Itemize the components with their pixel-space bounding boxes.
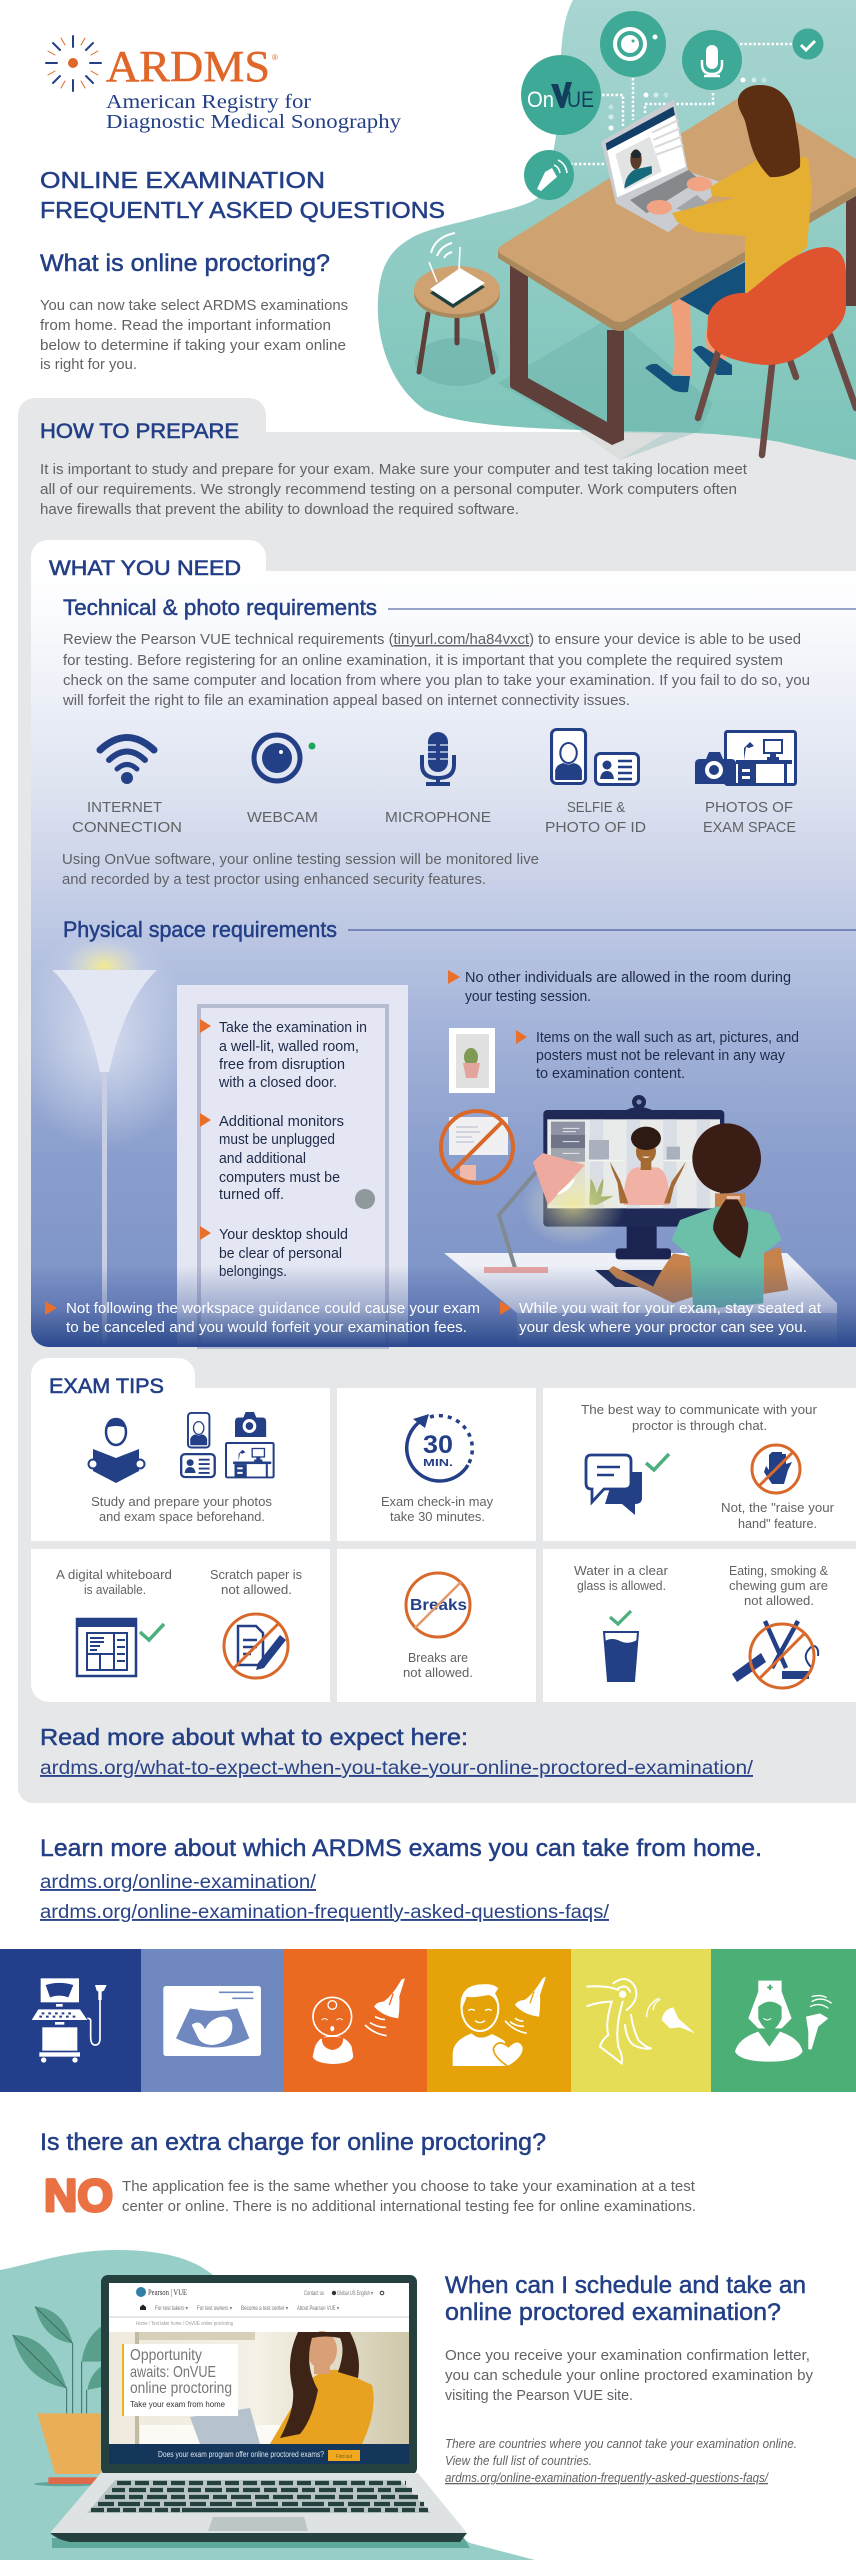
OnVue monitoring note: and recorded by a test proctor using enhanced security features. — [62, 871, 486, 888]
NO graphic: NO — [44, 2170, 113, 2221]
bullet: additional monitors: must be unplugged — [219, 1132, 335, 1148]
technical requirements text: will forfeit the right to file an examination appeal based on internet connectivity issues. — [62, 692, 630, 709]
heading: when can I schedule: When can I schedule and take an — [445, 2272, 806, 2299]
teal background blob — [378, 0, 856, 460]
icon: webcam — [254, 735, 316, 781]
logo wordmark: ARDMS — [106, 42, 270, 91]
label: photos of exam space: PHOTOS OF — [705, 799, 793, 816]
label: microphone: MICROPHONE — [385, 809, 491, 826]
bullet: items on the wall: posters must not be relevant in any way — [536, 1048, 786, 1064]
red chair — [707, 247, 846, 365]
cell: breaks not allowed: Breaks are — [408, 1650, 468, 1665]
hero card: awaits: OnVUE — [130, 2364, 216, 2381]
icon: no breaks — [406, 1573, 470, 1637]
bullet: no other individuals: No other individuals are allowed in the room during — [465, 970, 791, 986]
bullet: clear desktop: be clear of personal — [219, 1246, 342, 1262]
bullet: items on the wall: to examination content. — [536, 1066, 685, 1082]
bullet: well-lit room: Take the examination in — [219, 1020, 367, 1036]
floor lamp — [14, 930, 194, 1347]
bullet: additional monitors: Additional monitors — [219, 1114, 344, 1130]
icon: green check — [610, 1611, 631, 1624]
cell: communicate through chat: proctor is through chat. — [632, 1418, 767, 1433]
label: webcam: WEBCAM — [247, 809, 318, 826]
picture frame with cactus — [449, 1028, 495, 1093]
heading: when can I schedule: online proctored examination? — [445, 2299, 781, 2326]
woman seen from behind — [608, 1123, 788, 1310]
tip: study and prepare — [91, 1494, 273, 1524]
read more block: ardms.org/what-to-expect-when-you-take-your-online-proctored-examination/ — [40, 1758, 754, 1779]
read more block — [40, 1724, 754, 1779]
colored specialty icon band — [0, 1949, 856, 2092]
router side table — [414, 233, 500, 386]
heading: how to prepare: HOW TO PREPARE — [40, 420, 239, 443]
bullet: no other individuals: your testing session. — [465, 989, 591, 1005]
probe badge — [524, 150, 574, 200]
cell: breaks not allowed: not allowed. — [403, 1665, 473, 1680]
Pearson header: Become a test center ▾ — [241, 2306, 288, 2312]
bullet: workspace guidance: Not following the workspace guidance could cause your exam — [66, 1300, 480, 1317]
intro paragraph: below to determine if taking your exam online — [40, 337, 346, 354]
panel background gradient — [31, 540, 856, 1347]
icon: green check — [646, 1454, 669, 1470]
tile: fetal ultrasound — [141, 1949, 284, 2092]
label: selfie and photo of id — [545, 799, 646, 836]
cell: whiteboard and scratch paper: not allowed. — [221, 1582, 292, 1597]
technical requirements text: for testing. Before registering for an online examination, it is important that you complete the required system — [63, 652, 783, 669]
exam tips tab and first cell — [31, 1358, 330, 1541]
scheduling paragraph: visiting the Pearson VUE site. — [445, 2387, 633, 2404]
label: internet connection: INTERNET — [87, 799, 162, 816]
OnVUE badge: On — [527, 87, 554, 112]
desk — [444, 1253, 837, 1347]
bullet: items on the wall: Items on the wall such as art, pictures, and — [536, 1030, 799, 1046]
countries note: There are countries where you cannot take your examination online. — [445, 2436, 797, 2451]
tile: ultrasound machine — [0, 1949, 141, 2092]
intro paragraph: You can now take select ARDMS examinations — [40, 297, 348, 314]
grey panel background — [18, 398, 856, 1803]
shorts — [678, 262, 745, 315]
icon: 30 minute timer: MIN. — [423, 1457, 453, 1469]
label: photos of exam space — [703, 799, 796, 836]
hero card: Take your exam from home — [130, 2400, 226, 2409]
cell: communicate through chat: Not, the "raise your — [721, 1500, 835, 1515]
Pearson header: Contact us — [304, 2291, 324, 2297]
cell: breaks not allowed — [337, 1549, 536, 1702]
check badge — [792, 28, 824, 60]
cell: water and food: Water in a clear — [574, 1563, 669, 1578]
yellow shirt — [672, 157, 812, 293]
illustration: laptop with Pearson VUE page — [0, 2250, 535, 2560]
cell: water and food: Eating, smoking & — [729, 1563, 828, 1578]
how to prepare text: have firewalls that prevent the ability to download the required software. — [40, 501, 519, 518]
logo: ARDMS: Diagnostic Medical Sonography — [106, 111, 401, 133]
illustration: woman at desk taking online exam — [378, 0, 856, 460]
bullet: additional monitors: computers must be — [219, 1170, 340, 1186]
technical requirements text: Review the Pearson VUE technical requirements (tinyurl.com/ha84vxct) to ensure your device is able to be used — [63, 631, 801, 648]
call-to-action bar: Does your exam program offer online proctored exams? — [158, 2450, 324, 2459]
hero card: Opportunity — [130, 2347, 202, 2364]
how to prepare text: all of our requirements. We strongly recommend testing on a personal computer. Work computers often — [40, 481, 737, 498]
scheduling paragraph — [445, 2347, 813, 2404]
panel: what you need — [14, 540, 856, 1347]
Pearson header: For test takers ▾ — [155, 2306, 188, 2312]
bullet: additional monitors — [200, 1113, 344, 1203]
bullet: stay seated — [500, 1300, 822, 1336]
cell: whiteboard and scratch paper: A digital whiteboard — [56, 1567, 172, 1582]
Pearson header: About Pearson VUE ▾ — [297, 2306, 339, 2312]
bullet: clear desktop — [200, 1226, 348, 1280]
hero card — [122, 2344, 238, 2416]
desk legs — [510, 262, 624, 445]
pot — [37, 2413, 101, 2474]
title: ONLINE EXAMINATION — [40, 167, 325, 193]
label: selfie and photo of id: SELFIE & — [567, 799, 625, 816]
call-to-action bar — [109, 2444, 409, 2464]
extra charge answer — [122, 2178, 696, 2215]
heading: exam tips: EXAM TIPS — [49, 1375, 164, 1398]
bullet: well-lit room: a well-lit, walled room, — [219, 1039, 359, 1055]
cell: water and food — [543, 1549, 856, 1702]
heading: technical and photo requirements: Technical & photo requirements — [63, 595, 377, 620]
intro paragraph: is right for you. — [40, 356, 137, 373]
laptop — [601, 99, 727, 232]
how to prepare text: It is important to study and prepare for your exam. Make sure your computer and test taking location meet — [40, 461, 748, 478]
bullet: additional monitors: turned off. — [219, 1187, 284, 1203]
icon: 30 minute timer — [407, 1414, 472, 1481]
logo: ARDMS — [46, 36, 401, 133]
scheduling paragraph: you can schedule your online proctored examination by — [445, 2367, 813, 2384]
cell: check-in time: take 30 minutes. — [390, 1509, 485, 1524]
OnVue monitoring note — [62, 851, 539, 888]
tile: sonographer nurse — [711, 1949, 856, 2092]
countries note: View the full list of countries. — [445, 2453, 592, 2468]
icon: no raise hand — [752, 1445, 800, 1493]
bullet: stay seated: While you wait for your exam, stay seated at — [519, 1300, 822, 1317]
microphone badge — [682, 30, 742, 90]
keyboard keys — [91, 2483, 428, 2510]
hair — [738, 85, 800, 177]
label: selfie and photo of id: PHOTO OF ID — [545, 819, 646, 836]
cell: communicate through chat: The best way to communicate with your — [581, 1402, 818, 1417]
floor shadow of desk — [498, 316, 713, 460]
icon: study person reading — [88, 1418, 144, 1483]
cell: whiteboard and scratch paper: Scratch paper is — [210, 1567, 302, 1582]
bullet: workspace guidance: to be canceled and you would forfeit your examination fees. — [66, 1319, 467, 1336]
icon: microphone — [422, 732, 454, 784]
countries note: ardms.org/online-examination-frequently-asked-questions-faqs/ — [445, 2470, 769, 2485]
heading: physical space requirements: Physical space requirements — [63, 917, 337, 942]
keyboard on desk — [595, 1270, 693, 1287]
title — [40, 167, 445, 223]
icon: digital whiteboard — [76, 1618, 137, 1676]
icon: no eating, smoking, gum — [732, 1621, 818, 1688]
extra charge answer: center or online. There is no additional international testing fee for online examinations. — [122, 2198, 696, 2215]
call-to-action bar: Find out — [336, 2454, 352, 2460]
panel: exam tips — [31, 1358, 856, 1702]
bullet: no other individuals — [448, 970, 791, 1005]
hero photo — [109, 2331, 409, 2444]
heading: what you need: WHAT YOU NEED — [49, 557, 241, 580]
webcam on monitor — [626, 1095, 652, 1110]
cell: whiteboard and scratch paper — [31, 1549, 330, 1702]
door knob — [355, 1189, 375, 1209]
tip: study and prepare: and exam space beforehand. — [99, 1509, 265, 1524]
logo starburst — [46, 36, 101, 91]
read more block: Read more about what to expect here: — [40, 1724, 468, 1750]
cell: communicate through chat: hand" feature. — [738, 1516, 817, 1531]
heading: extra charge: Is there an extra charge for online proctoring? — [40, 2129, 546, 2156]
hands — [647, 177, 712, 215]
icon: glass of water — [604, 1632, 638, 1682]
laptop base — [50, 2473, 470, 2548]
bullet: clear desktop: belongings. — [219, 1264, 287, 1280]
monitor — [543, 1110, 724, 1259]
desk back leg — [846, 190, 856, 306]
bullet: well-lit room — [200, 1019, 367, 1091]
plant — [13, 2307, 103, 2486]
connector dots — [570, 44, 793, 164]
heading: what is online proctoring: What is online proctoring? — [40, 250, 330, 277]
webcam badge — [600, 11, 666, 77]
door — [177, 985, 408, 1347]
desk top — [498, 92, 856, 331]
intro paragraph — [40, 297, 348, 373]
icon: no breaks: Breaks — [410, 1597, 467, 1614]
title: FREQUENTLY ASKED QUESTIONS — [40, 197, 445, 223]
cell: water and food: chewing gum are — [729, 1578, 828, 1593]
how to prepare text — [40, 461, 748, 518]
logo: ARDMS: American Registry for — [106, 91, 311, 113]
bullet: additional monitors: and additional — [219, 1151, 306, 1167]
laptop screen — [101, 2275, 417, 2475]
learn more block: ardms.org/online-examination/ — [40, 1872, 317, 1893]
intro paragraph: from home. Read the important information — [40, 317, 331, 334]
video proctor — [624, 1167, 669, 1205]
icon: wifi — [100, 738, 154, 784]
OnVUE badge: UE — [567, 87, 594, 112]
icon: camera and exam space — [695, 732, 796, 784]
tile: pediatric — [284, 1949, 427, 2092]
desk lamp — [484, 1153, 625, 1273]
cell: whiteboard and scratch paper: is available. — [84, 1582, 146, 1597]
label: internet connection — [72, 799, 182, 836]
Pearson header: Pearson | VUE — [148, 2288, 187, 2297]
cell: water and food: not allowed. — [744, 1593, 814, 1608]
heading: when can I schedule — [445, 2272, 806, 2326]
bullet: stay seated: your desk where your proctor can see you. — [519, 1319, 807, 1336]
Pearson header: Global US English ▾ — [337, 2291, 373, 2297]
countries note — [445, 2436, 797, 2485]
icon: selfie and ID — [552, 730, 638, 784]
Pearson header: Home / Test taker home / OnVUE online proctoring — [136, 2321, 233, 2327]
hero card: online proctoring — [130, 2380, 232, 2397]
Pearson header — [136, 2287, 384, 2327]
bullet: clear desktop: Your desktop should — [219, 1227, 348, 1243]
bullet: items on the wall — [516, 1030, 799, 1082]
label: internet connection: CONNECTION — [72, 819, 182, 836]
tip: study and prepare: Study and prepare your photos — [91, 1494, 273, 1509]
bottom fade — [31, 1265, 856, 1347]
icon: 30 minute timer: 30 — [423, 1431, 453, 1459]
cell: check-in time — [337, 1388, 536, 1541]
learn more block — [40, 1835, 762, 1923]
OnVUE badge — [521, 55, 601, 135]
icon: phone, id, camera, desk — [181, 1412, 274, 1477]
teal blob — [0, 2250, 535, 2560]
bullet: well-lit room: free from disruption — [219, 1057, 345, 1073]
bullet: workspace guidance — [45, 1300, 480, 1336]
Pearson header: For test owners ▾ — [197, 2306, 232, 2312]
icon: no scratch paper — [224, 1614, 288, 1678]
learn more block: ardms.org/online-examination-frequently-asked-questions-faqs/ — [40, 1902, 610, 1923]
technical requirements text — [62, 631, 810, 709]
icon: green check — [140, 1624, 164, 1640]
scheduling paragraph: Once you receive your examination confirmation letter, — [445, 2347, 810, 2364]
technical requirements text: check on the same computer and location from where you plan to take your examination. If you fail to do so, you — [63, 672, 810, 689]
extra charge answer: The application fee is the same whether you choose to take your examination at a test — [122, 2178, 696, 2195]
cell: communicate through chat — [543, 1388, 856, 1541]
prohibited poster — [441, 1111, 513, 1183]
chair legs — [698, 335, 856, 455]
logo: ARDMS: ® — [272, 53, 278, 62]
OnVue monitoring note: Using OnVue software, your online testing session will be monitored live — [62, 851, 539, 868]
cell: water and food: glass is allowed. — [577, 1578, 666, 1593]
cell: check-in time: Exam check-in may — [381, 1494, 493, 1509]
icon: chat bubbles — [586, 1455, 642, 1515]
tile: cardiac — [427, 1949, 571, 2092]
label: photos of exam space: EXAM SPACE — [703, 819, 796, 836]
tile: vascular legs — [571, 1949, 711, 2092]
bullet: well-lit room: with a closed door. — [218, 1075, 337, 1091]
legs and shoes — [645, 298, 732, 392]
learn more block: Learn more about which ARDMS exams you can take from home. — [40, 1835, 762, 1862]
